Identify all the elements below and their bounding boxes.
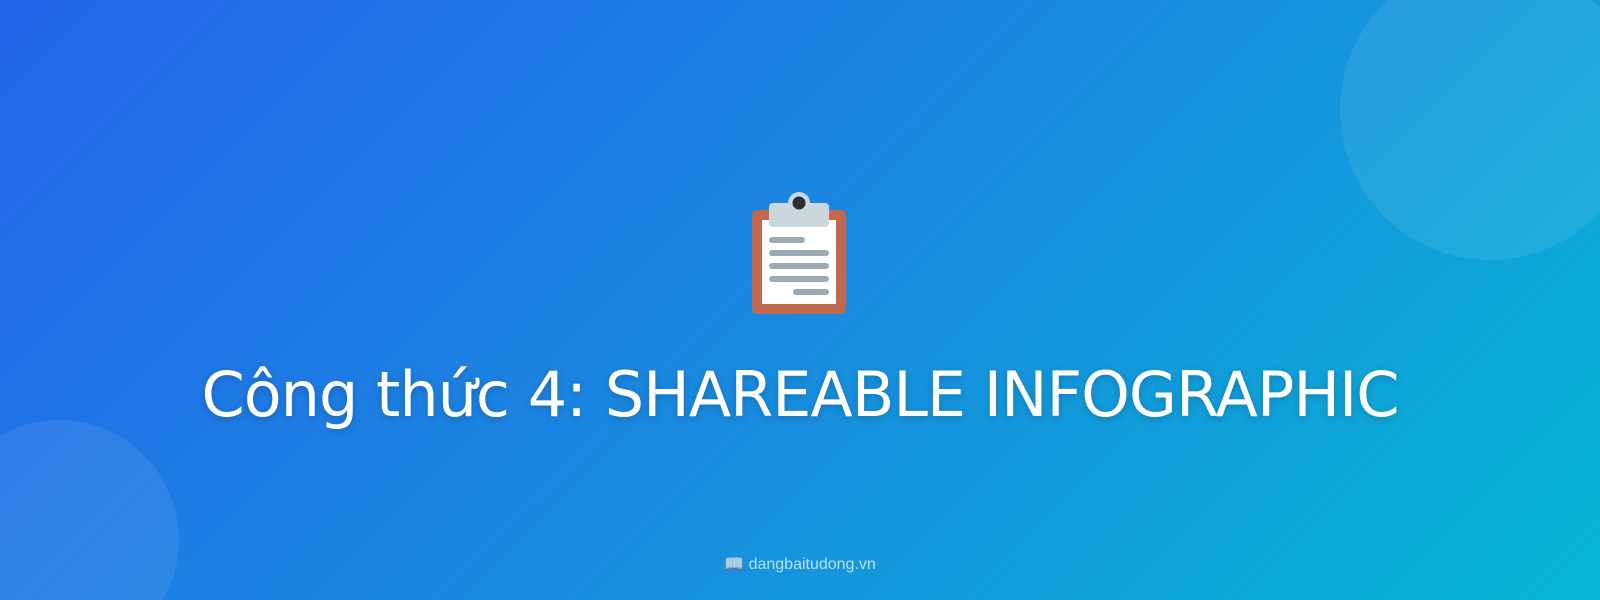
- footer: source: 📖 dangbaitudong.vn: [724, 556, 876, 573]
- title: Công thức 4: SHAREABLE INFOGRAPHIC: [201, 358, 1399, 431]
- icon: clipboard: [752, 192, 846, 314]
